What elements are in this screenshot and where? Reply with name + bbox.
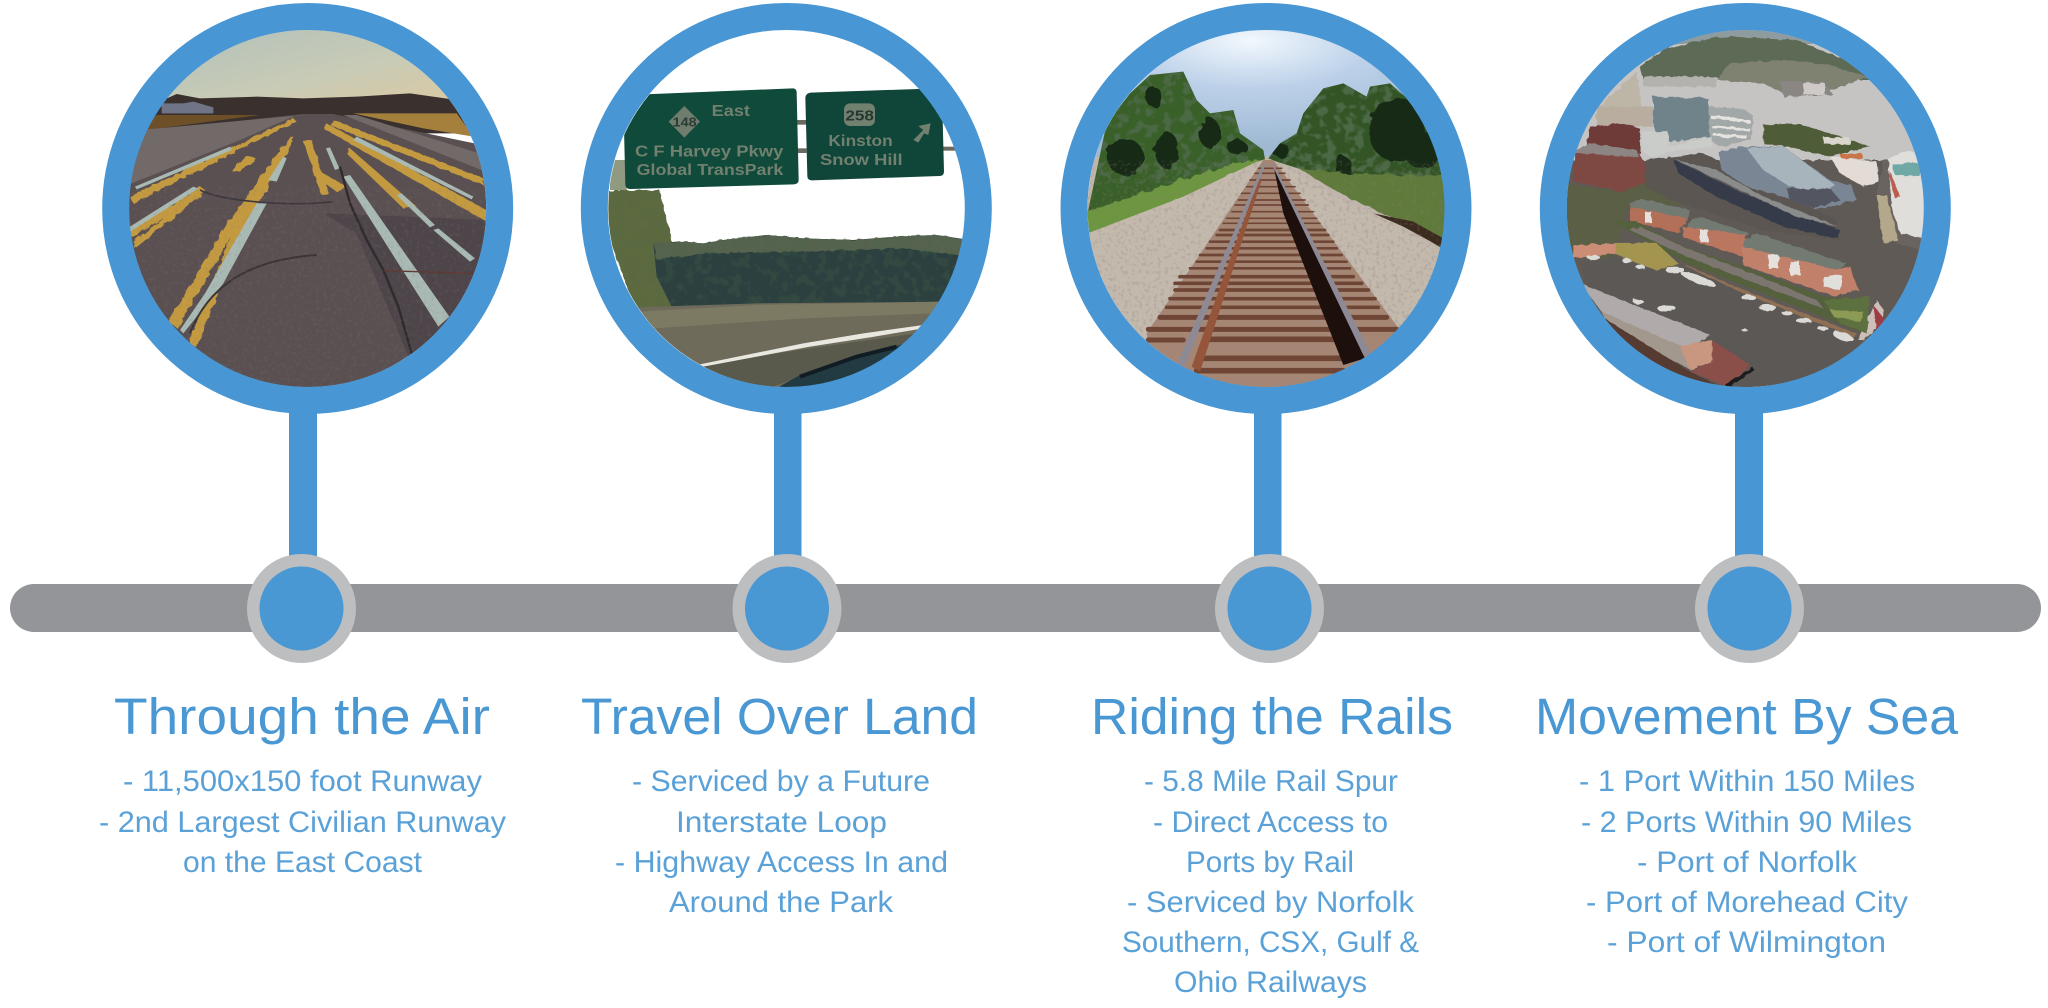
sign: NC 148 East [623, 88, 799, 189]
body text [99, 765, 506, 879]
body text: - Serviced by Norfolk [1127, 886, 1415, 919]
body text [1122, 765, 1419, 999]
sign: US 258 [805, 88, 944, 180]
sign: US 258: Kinston [828, 133, 893, 150]
panel: movement by sea [1535, 16, 1959, 959]
body text: - Serviced by a Future [632, 765, 930, 798]
sign: NC 148 East: Global TransPark [637, 162, 784, 179]
sign: NC 148 East: East [712, 103, 750, 120]
body text: Ports by Rail [1186, 846, 1354, 879]
sign: US 258: 258 [845, 109, 874, 125]
timeline bar [10, 584, 2041, 632]
connector stem [1735, 412, 1763, 558]
panel: travel over land [581, 16, 978, 919]
body text: - Highway Access In and [615, 846, 948, 879]
ring [594, 16, 978, 400]
body text: - 11,500x150 foot Runway [123, 765, 482, 798]
boats [1587, 255, 1855, 344]
sign: NC 148 East: C F Harvey Pkwy [635, 144, 784, 161]
photo: railroad track [1083, 27, 1453, 393]
body text: on the East Coast [183, 846, 423, 879]
body text: - 2nd Largest Civilian Runway [99, 806, 506, 839]
body text: - 1 Port Within 150 Miles [1579, 765, 1915, 798]
body text: Around the Park [669, 886, 894, 919]
connector stem [1254, 412, 1282, 558]
heading: Riding the Rails [1091, 688, 1453, 745]
timeline node [1695, 554, 1804, 663]
panel: through the air [99, 16, 506, 879]
photo: harbor aerial [1560, 23, 1933, 393]
sign: NC 148 East: 148 [673, 115, 697, 130]
timeline node [247, 554, 356, 663]
panel: riding the rails [1074, 16, 1458, 999]
battleship [1673, 147, 1857, 239]
connector stem [289, 412, 317, 558]
body text: - Direct Access to [1153, 806, 1388, 839]
brick townhouses [1630, 198, 1858, 297]
sign: US 258: Snow Hill [820, 152, 903, 169]
body text: Southern, CSX, Gulf & [1122, 926, 1419, 959]
body text: Interstate Loop [676, 806, 887, 839]
ring [1074, 16, 1458, 400]
timeline node [1215, 554, 1324, 663]
body text [1579, 765, 1915, 959]
waterfront building [1580, 283, 1750, 390]
photo: highway signs [603, 27, 973, 390]
body text: - Port of Wilmington [1607, 926, 1886, 959]
body text: - 2 Ports Within 90 Miles [1581, 806, 1912, 839]
ring [1553, 16, 1937, 400]
body text: Ohio Railways [1174, 966, 1367, 999]
timeline node [732, 554, 842, 663]
connector stem [774, 412, 802, 558]
body text [615, 765, 948, 919]
heading: Travel Over Land [581, 688, 978, 745]
heading: Through the Air [114, 688, 490, 745]
body text: - 5.8 Mile Rail Spur [1144, 765, 1398, 798]
heading: Movement By Sea [1535, 688, 1959, 745]
body text: - Port of Morehead City [1586, 886, 1908, 919]
cruise ship [1888, 150, 1927, 238]
ring [116, 16, 500, 400]
body text: - Port of Norfolk [1637, 846, 1858, 879]
photo: airport runway [123, 27, 493, 390]
